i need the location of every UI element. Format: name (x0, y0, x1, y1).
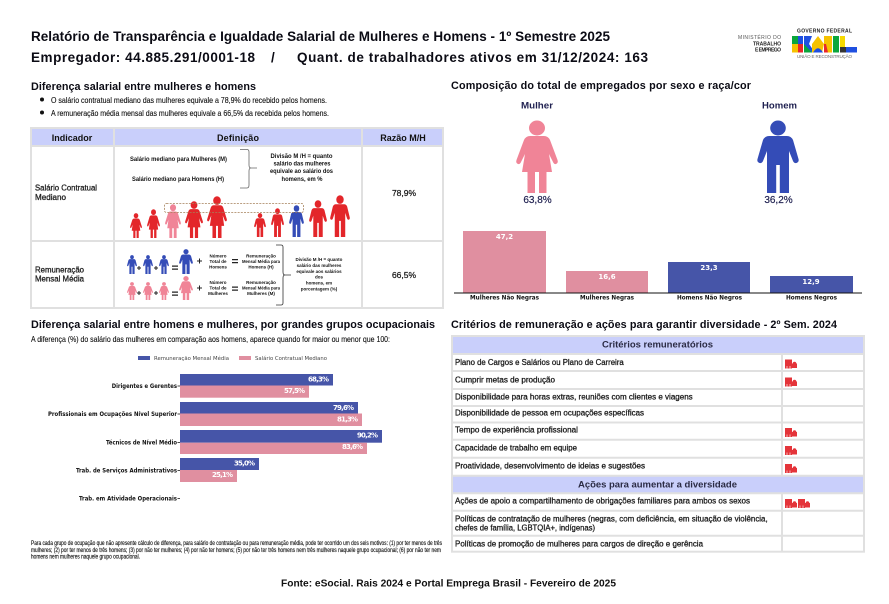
row: salário contratual mediano: homens, em % (282, 177, 323, 183)
panel: indicator table: Indicador (52, 133, 93, 143)
title: Relatório de Transparência e Igualdade Salarial de Mulheres e Homens - 1º Semestre 2025 (31, 29, 610, 44)
bar chart: sexo e raça (454, 231, 862, 302)
icon: mulher: 63,8% (523, 195, 552, 206)
row: remuneração mensal média: Mensal Média (35, 274, 85, 284)
icon: mulher (516, 101, 558, 206)
bar chart: sexo e raça: 47,2 (496, 233, 513, 241)
bullet list (40, 96, 329, 118)
title (31, 29, 648, 65)
row: remuneração mensal média: Remuneração (246, 254, 276, 258)
bar chart: grupos ocupacionais: Trab. de Serviços Administrativos (76, 468, 177, 474)
bar chart: grupos ocupacionais: 90,2% (357, 432, 378, 440)
logo: governo federal (792, 29, 857, 59)
panel: criteria table: Capacidade de trabalho em equipe (455, 444, 578, 453)
icons: median salary figures (130, 195, 350, 238)
title: Quant. de trabalhadores ativos em 31/12/2024: 163 (297, 50, 648, 65)
heading: critérios: Critérios de remuneração e ações para garantir diversidade - 2º Sem. 2024 (451, 319, 837, 331)
heading: grupos ocupacionais: Diferença salarial entre homens e mulheres, por grandes grupos ocupacionais (31, 319, 435, 331)
legend: Salário Contratual Mediano (255, 355, 328, 362)
icon: mulher: Mulher (521, 101, 553, 112)
row: remuneração mensal média: Homens (H) (248, 264, 274, 270)
logo: ministério: MINISTÉRIO DO (738, 34, 781, 41)
bar chart: sexo e raça: 16,6 (598, 273, 616, 281)
row: remuneração mensal média: salário das mulheres (297, 263, 342, 268)
icon: homem: 36,2% (764, 195, 793, 206)
bar chart: grupos ocupacionais: 57,5% (284, 387, 305, 395)
icons: criteria marks (785, 360, 810, 508)
row: remuneração mensal média: Número (209, 254, 227, 258)
panel: criteria table: Disponibilidade de pessoa em ocupações específicas (455, 409, 644, 418)
row: remuneração mensal média: dos (315, 274, 323, 280)
row: salário contratual mediano: equivale ao salário dos (270, 169, 334, 175)
row: salário contratual mediano: Divisão M /H = quanto (270, 154, 333, 160)
row: salário contratual mediano: 78,9% (392, 188, 416, 198)
footnote: Para cada grupo de ocupação que não apresente cálculo de diferença, para salário de contratação ou para remuneração média, pode ter ocorrido um dos seis motivos: (1) por ter menos de três (31, 541, 442, 547)
panel: criteria table: Critérios remuneratórios (602, 340, 713, 351)
row: salário contratual mediano: salário das mulheres (274, 162, 331, 168)
panel: criteria table (452, 336, 864, 552)
logo: governo federal: GOVERNO FEDERAL (797, 29, 852, 35)
bar chart: grupos ocupacionais: Técnicos de Nível Médio (106, 440, 177, 446)
bar chart: sexo e raça: 12,9 (802, 278, 820, 286)
bar chart: sexo e raça: Homens Negros (786, 294, 837, 302)
bar chart: sexo e raça: 23,3 (700, 264, 718, 272)
bar chart: sexo e raça: Homens Não Negros (677, 294, 742, 302)
icon: homem (757, 101, 799, 206)
row: remuneração mensal média: Total de (210, 259, 227, 264)
footnote (31, 541, 442, 560)
row: remuneração mensal média: Mensal Média para (242, 286, 280, 290)
subtitle: grupos ocupacionais: A diferença (%) do salário das mulheres em comparação aos homens, aparece quando for maior ou menor que 100: (31, 335, 390, 344)
row: salário contratual mediano (35, 150, 416, 202)
logo: governo federal: UNIÃO E RECONSTRUÇÃO (797, 53, 852, 59)
bar chart: grupos ocupacionais: Profissionais em Ocupações Nível Superior (48, 411, 177, 418)
panel: criteria table: Proatividade, desenvolvimento de ideias e sugestões (455, 462, 645, 471)
legend: Remuneração Mensal Média (154, 355, 229, 362)
row: remuneração mensal média: Mulheres (M) (247, 291, 275, 296)
source: Fonte: eSocial. Rais 2024 e Portal Emprega Brasil - Fevereiro de 2025 (281, 578, 616, 590)
bar chart: grupos ocupacionais: 35,0% (234, 460, 255, 468)
panel: indicator table (31, 128, 443, 308)
bar chart: grupos ocupacionais: 68,3% (308, 376, 329, 384)
bar chart: sexo e raça: Mulheres Negras (580, 294, 634, 302)
panel: criteria table: Plano de Cargos e Salários ou Plano de Carreira (455, 358, 624, 367)
panel: criteria table: Ações para aumentar a diversidade (578, 480, 737, 491)
panel: criteria table: Disponibilidade para horas extras, reuniões com clientes e viagens (455, 393, 693, 402)
row: remuneração mensal média: Total de (210, 286, 227, 290)
row: remuneração mensal média (35, 245, 416, 305)
logo: ministério: E EMPREGO (755, 48, 781, 54)
row: remuneração mensal média: homens, em (306, 280, 332, 286)
icon: homem: Homem (762, 101, 797, 112)
panel: criteria table: Políticas de contratação de mulheres (negras, com deficiência, em situação de violência, (455, 514, 768, 523)
row: remuneração mensal média: porcentagem (%) (301, 286, 338, 292)
panel: criteria table: chefes de família, LGBTQIA+, indígenas) (455, 524, 595, 533)
row: remuneração mensal média: Mensal Média para (242, 259, 280, 264)
bullet list: A remuneração média mensal das mulheres equivale a 66,5% da recebida pelos homens. (51, 109, 329, 118)
panel: indicator table: Razão M/H (380, 133, 426, 143)
bar chart: grupos ocupacionais: 25,1% (212, 471, 233, 479)
row: salário contratual mediano: Salário Contratual (35, 184, 97, 192)
logo: ministério: TRABALHO (753, 42, 781, 48)
bar chart: grupos ocupacionais: Trab. em Atividade Operacionais (79, 496, 177, 502)
heading: diferença salarial: Diferença salarial entre mulheres e homens (31, 81, 256, 93)
bar chart: sexo e raça: Mulheres Não Negras (470, 294, 539, 302)
bar chart: grupos ocupacionais (48, 374, 382, 502)
panel: criteria table: Tempo de experiência profissional (455, 425, 578, 434)
row: remuneração mensal média: Remuneração (35, 266, 85, 275)
footnote: mulheres; (2) por ter menos de três homens; (3) por não ter mulheres; (4) por não ter homens; (5) por não ter três homens nem três mulheres naquele grupo ocupacional; (6) por não ter nem (31, 548, 441, 554)
row: remuneração mensal média: Divisão M /H = quanto (296, 257, 343, 262)
row: remuneração mensal média: Número (209, 280, 227, 285)
panel: criteria table: Políticas de promoção de mulheres para cargos de direção e gerência (455, 540, 704, 549)
panel: criteria table: Cumprir metas de produção (455, 376, 556, 385)
logo: ministério (738, 34, 781, 54)
row: salário contratual mediano: Salário mediano para Mulheres (M) (130, 157, 227, 163)
bar chart: grupos ocupacionais: Dirigentes e Gerentes (112, 383, 177, 390)
bar chart: grupos ocupacionais: 81,3% (337, 416, 358, 424)
footnote: homens nem mulheres naquele grupo ocupacional. (31, 554, 140, 560)
title: / (271, 50, 275, 65)
heading: composição: Composição do total de empregados por sexo e raça/cor (451, 80, 752, 92)
panel: indicator table: Definição (217, 133, 260, 143)
bar chart: grupos ocupacionais: 79,6% (333, 404, 354, 412)
row: remuneração mensal média: Mulheres (208, 291, 228, 296)
row: remuneração mensal média: 66,5% (392, 270, 416, 280)
bullet list: O salário contratual mediano das mulheres equivale a 78,9% do recebido pelos homens. (51, 96, 327, 105)
row: remuneração mensal média: Remuneração (246, 280, 276, 285)
title: Empregador: 44.885.291/0001-18 (31, 50, 255, 65)
row: remuneração mensal média: equivale aos salários (296, 269, 342, 274)
bar chart: grupos ocupacionais: 83,6% (342, 443, 363, 451)
row: salário contratual mediano: Mediano (35, 193, 67, 202)
row: remuneração mensal média: Homens (209, 264, 227, 270)
panel: criteria table: Ações de apoio a compartilhamento de obrigações familiares para ambos os sexos (455, 497, 750, 506)
legend (138, 355, 328, 362)
row: salário contratual mediano: Salário mediano para Homens (H) (132, 177, 224, 183)
